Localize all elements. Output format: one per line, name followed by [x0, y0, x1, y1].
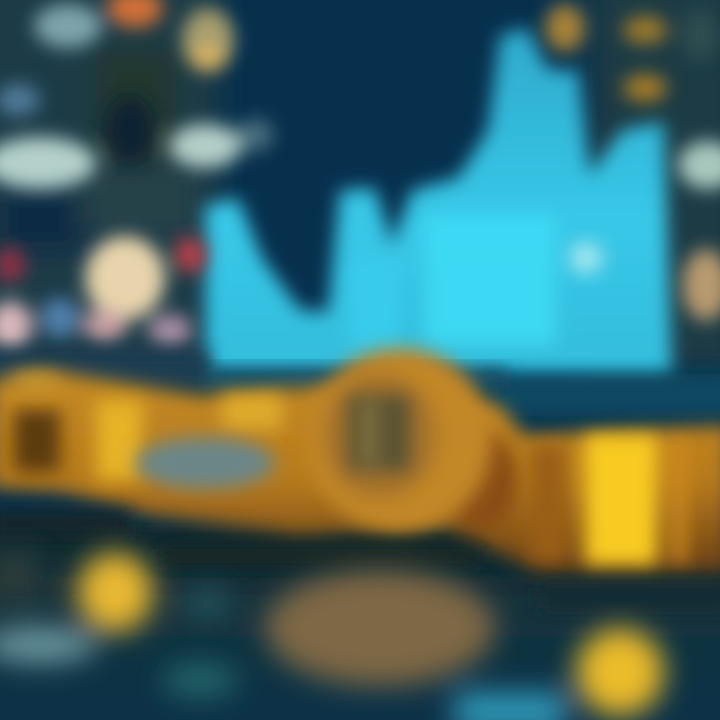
- horizon: dark band above coins: [0, 352, 210, 388]
- large central coin: [308, 348, 492, 532]
- floor: dark reflective surface: [0, 525, 720, 720]
- coin stack highlights: [9, 371, 686, 565]
- chart highlight: [569, 242, 603, 274]
- left bokeh lights: [0, 0, 273, 349]
- gold coin stacks band: [0, 372, 720, 572]
- dark shadow below coins: [0, 510, 720, 608]
- reflections on floor: [0, 550, 664, 720]
- flat grey coin: [135, 437, 275, 489]
- right bokeh lights: [545, 4, 720, 321]
- chart: cyan bars: [205, 28, 672, 378]
- left backdrop: muted city bokeh: [0, 0, 720, 370]
